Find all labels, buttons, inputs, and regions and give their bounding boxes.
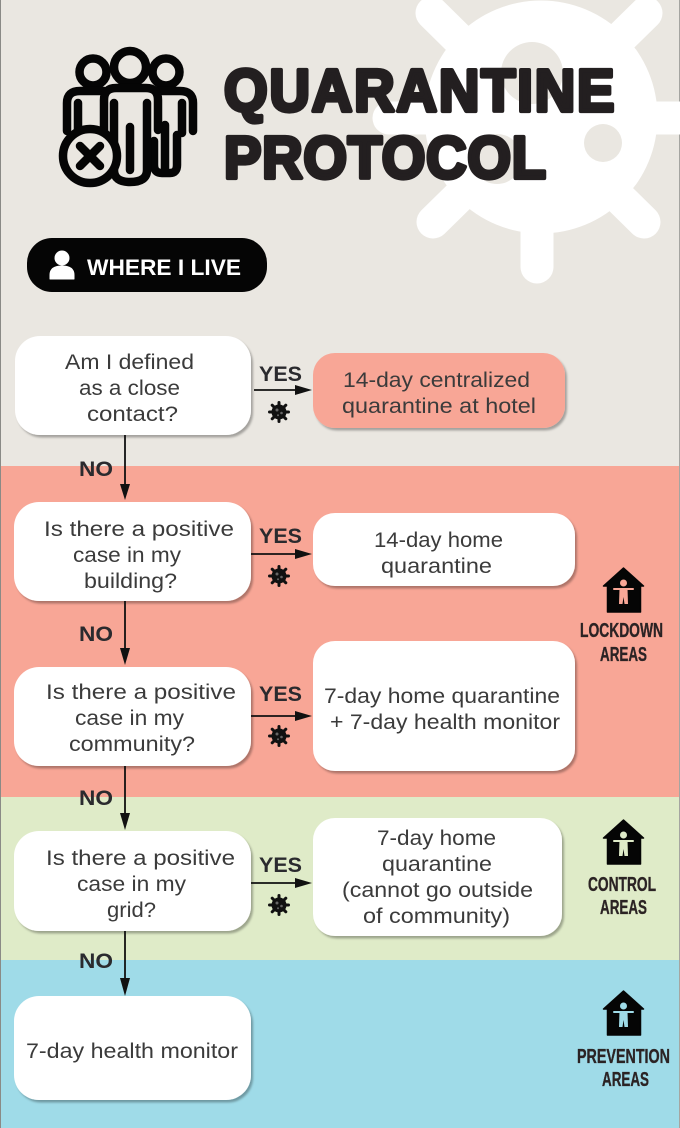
no arrow 1: NO bbox=[79, 458, 113, 481]
question: positive case in community bbox=[14, 667, 251, 766]
question: positive case in building: case in my bbox=[73, 544, 182, 567]
outcome: 14-day home quarantine bbox=[313, 513, 575, 586]
outcome: centralized quarantine: quarantine at hotel bbox=[342, 395, 536, 418]
question: close contact: Am I defined bbox=[65, 351, 194, 374]
no arrow 2: NO bbox=[79, 623, 113, 646]
outcome: centralized quarantine: 14-day centralized bbox=[343, 369, 530, 392]
no arrow 2 bbox=[79, 601, 130, 665]
outcome: 7-day health monitor bbox=[14, 996, 251, 1100]
outcome: 14-day home quarantine: 14-day home bbox=[374, 529, 503, 552]
yes branch 1: YES bbox=[259, 363, 302, 386]
background band: beige bbox=[0, 0, 680, 466]
question: positive case in grid: case in my bbox=[77, 873, 187, 896]
yes branch 2: YES bbox=[259, 525, 302, 548]
outcome: 7-day home quarantine plus monitor: + 7-day health monitor bbox=[330, 711, 560, 734]
question: close contact bbox=[15, 336, 251, 435]
outcome: 7-day home quarantine, cannot leave: (cannot go outside bbox=[342, 879, 533, 902]
question: close contact: as a close bbox=[79, 377, 180, 400]
no arrow 3: NO bbox=[79, 787, 113, 810]
outcome: 7-day home quarantine plus monitor bbox=[313, 641, 575, 771]
outcome: 7-day home quarantine, cannot leave: of community) bbox=[363, 905, 510, 928]
question: positive case in community: case in my bbox=[75, 707, 185, 730]
title: PROTOCOL bbox=[224, 126, 546, 191]
no arrow 3 bbox=[79, 766, 130, 830]
background band: lockdown areas bbox=[0, 466, 680, 797]
background band: prevention areas bbox=[0, 960, 680, 1128]
yes branch 4 bbox=[251, 854, 312, 914]
label: control areas: AREAS bbox=[600, 897, 647, 919]
question: positive case in building: Is there a positive bbox=[44, 518, 234, 541]
question: close contact: contact? bbox=[87, 403, 178, 426]
icon: person bbox=[50, 250, 74, 279]
title: QUARANTINE bbox=[224, 59, 614, 124]
badge: where I live bbox=[27, 238, 267, 292]
outcome: 7-day health monitor: 7-day health monitor bbox=[26, 1040, 238, 1063]
question: positive case in grid: grid? bbox=[107, 899, 156, 922]
question: positive case in building bbox=[14, 502, 251, 601]
question: positive case in community: Is there a positive bbox=[46, 681, 236, 704]
outcome: centralized quarantine bbox=[313, 353, 565, 428]
yes branch 4: YES bbox=[259, 854, 302, 877]
question: positive case in grid bbox=[14, 831, 251, 931]
yes branch 2 bbox=[251, 525, 312, 586]
outcome: 14-day home quarantine: quarantine bbox=[381, 555, 492, 578]
outcome: 7-day home quarantine plus monitor: 7-day home quarantine bbox=[324, 685, 560, 708]
badge label: WHERE I LIVE bbox=[87, 255, 241, 280]
label: lockdown areas: AREAS bbox=[600, 644, 647, 666]
label: prevention areas bbox=[577, 991, 670, 1091]
yes branch 1 bbox=[254, 363, 312, 422]
label: lockdown areas bbox=[580, 568, 663, 666]
no arrow 4: NO bbox=[79, 950, 113, 973]
outcome: 7-day home quarantine, cannot leave: 7-day home bbox=[377, 827, 496, 850]
label: prevention areas: AREAS bbox=[602, 1069, 649, 1091]
question: positive case in grid: Is there a positive bbox=[46, 847, 235, 870]
title bbox=[224, 59, 614, 191]
question: positive case in building: building? bbox=[84, 570, 177, 593]
yes branch 3 bbox=[251, 683, 312, 746]
outcome: 7-day home quarantine, cannot leave bbox=[313, 818, 562, 936]
icon: group of people with X bbox=[63, 51, 193, 183]
decorative virus watermark bbox=[389, 0, 680, 267]
background band: control areas bbox=[0, 797, 680, 960]
yes branch 3: YES bbox=[259, 683, 302, 706]
outcome: 7-day home quarantine, cannot leave: quarantine bbox=[382, 853, 492, 876]
no arrow 1 bbox=[79, 435, 130, 500]
no arrow 4 bbox=[79, 931, 130, 996]
label: control areas bbox=[588, 820, 656, 919]
question: positive case in community: community? bbox=[69, 733, 195, 756]
